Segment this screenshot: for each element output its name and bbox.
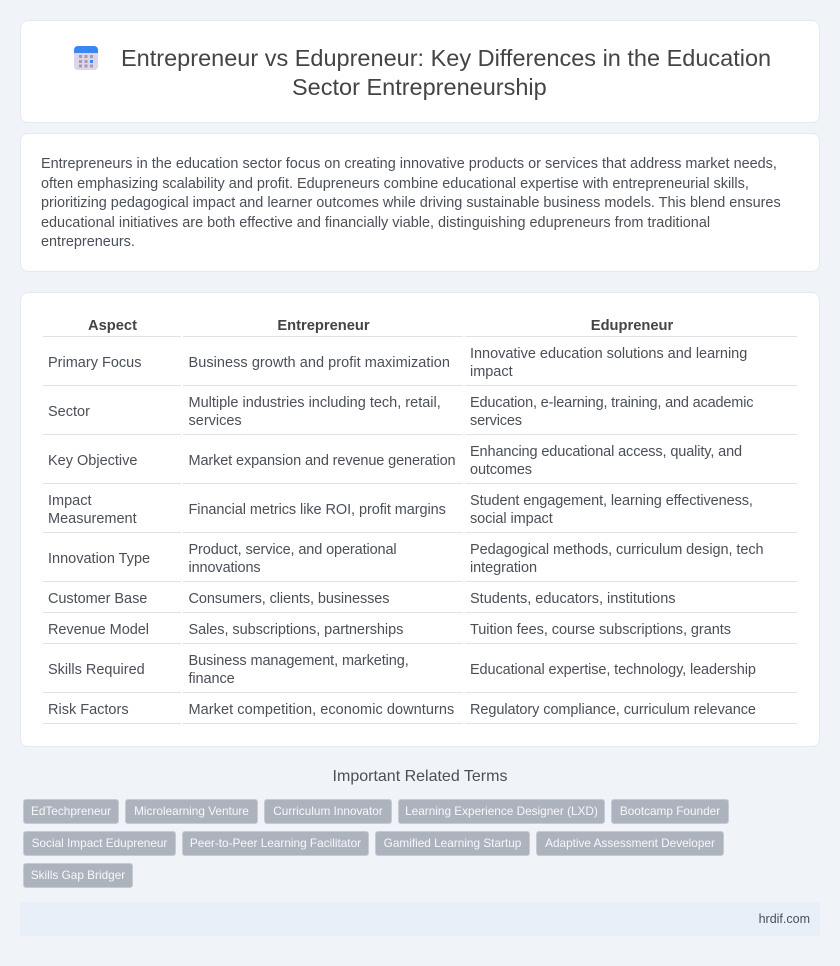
tags: related terms: EdTechpreneur — [31, 804, 111, 818]
heading: related terms: Important Related Terms — [333, 768, 507, 785]
tags: related terms: Bootcamp Founder — [620, 804, 720, 818]
tags: related terms: Microlearning Venture — [134, 804, 249, 818]
row: Key Objective: Market expansion and revenue generation — [188, 453, 455, 469]
panel: introduction — [20, 133, 820, 272]
table column headers: Edupreneur — [591, 318, 673, 334]
row: Impact Measurement: Student engagement, learning effectiveness, — [470, 493, 753, 509]
row: Innovation Type: Pedagogical methods, curriculum design, tech — [470, 542, 764, 558]
row: Key Objective — [48, 444, 742, 478]
row: Risk Factors: Regulatory compliance, curriculum relevance — [470, 702, 756, 718]
text block: introduction: educational initiatives are both effective and financially viable, distinguishing edupreneurs from traditional — [41, 214, 710, 230]
row: Skills Required: Skills Required — [48, 662, 145, 678]
row: Sector: Multiple industries including tech, retail, — [188, 395, 441, 411]
text block: introduction: entrepreneurs. — [41, 234, 135, 250]
title — [121, 45, 771, 100]
row: Key Objective: Enhancing educational access, quality, and — [470, 444, 742, 460]
text block: introduction: often emphasizing scalability and profit. Edupreneurs combine educational expertise with entrepreneurial skills, — [41, 176, 749, 192]
row: Revenue Model — [48, 622, 731, 638]
row: Risk Factors — [48, 702, 756, 718]
tags: related terms: Peer-to-Peer Learning Facilitator — [190, 836, 361, 850]
footer — [20, 902, 820, 936]
row: Skills Required: finance — [188, 671, 235, 687]
row: Primary Focus: impact — [470, 364, 513, 380]
title: Entrepreneur vs Edupreneur: Key Differences in the Education — [121, 45, 771, 71]
row: Innovation Type — [48, 542, 764, 576]
row: Impact Measurement: Impact — [48, 493, 92, 509]
row: Risk Factors: Risk Factors — [48, 702, 129, 718]
row: Innovation Type: integration — [470, 560, 537, 576]
row: Innovation Type: Product, service, and operational — [188, 542, 397, 558]
row: Primary Focus: Business growth and profit maximization — [188, 355, 450, 371]
row: Impact Measurement — [48, 493, 753, 527]
tags: related terms — [23, 799, 729, 888]
row: Innovation Type: innovations — [188, 560, 261, 576]
row: Impact Measurement: social impact — [470, 511, 553, 527]
row: Skills Required — [48, 653, 756, 687]
row: Impact Measurement: Measurement — [48, 511, 137, 527]
row: Customer Base — [48, 591, 676, 607]
icon: calendar — [74, 46, 98, 70]
row: Customer Base: Students, educators, institutions — [470, 591, 676, 607]
tags: related terms: Learning Experience Designer (LXD) — [405, 804, 598, 818]
row: Innovation Type: Innovation Type — [48, 551, 150, 567]
tags: related terms: Curriculum Innovator — [273, 804, 383, 818]
tags: related terms: Skills Gap Bridger — [31, 868, 125, 882]
panel: comparison table — [20, 292, 820, 747]
row: Sector: services — [470, 413, 522, 429]
row: Revenue Model: Tuition fees, course subscriptions, grants — [470, 622, 731, 638]
row: Primary Focus: Innovative education solutions and learning — [470, 346, 747, 362]
row: Impact Measurement: Financial metrics like ROI, profit margins — [188, 502, 446, 518]
row: Key Objective: Key Objective — [48, 453, 137, 469]
row: Customer Base: Customer Base — [48, 591, 147, 607]
table column headers: Aspect — [88, 318, 137, 334]
panel: header — [20, 20, 820, 123]
text block: introduction: Entrepreneurs in the education sector focus on creating innovative products or services that address market needs, — [41, 156, 777, 172]
row: Sector: Sector — [48, 404, 90, 420]
text block: introduction: prioritizing pedagogical impact and learner outcomes while driving sustainable business models. This blend ensures — [41, 195, 781, 211]
row: Risk Factors: Market competition, economic downturns — [188, 702, 454, 718]
text block: introduction — [41, 156, 781, 250]
tags: related terms: Adaptive Assessment Developer — [545, 836, 715, 850]
tags: related terms: Gamified Learning Startup — [384, 836, 521, 850]
title: Sector Entrepreneurship — [292, 74, 547, 100]
row: Skills Required: Educational expertise, technology, leadership — [470, 662, 756, 678]
row: Sector — [48, 395, 754, 429]
table column headers — [88, 318, 673, 334]
row: Revenue Model: Revenue Model — [48, 622, 149, 638]
table column headers: Entrepreneur — [277, 318, 370, 334]
row: Key Objective: outcomes — [470, 462, 532, 478]
row: Customer Base: Consumers, clients, businesses — [188, 591, 389, 607]
row: Revenue Model: Sales, subscriptions, partnerships — [188, 622, 403, 638]
row: Sector: services — [188, 413, 242, 429]
tags: related terms: Social Impact Edupreneur — [32, 836, 167, 850]
row: Primary Focus: Primary Focus — [48, 355, 141, 371]
row: Primary Focus — [48, 346, 747, 380]
footer: source: hrdif.com — [759, 912, 810, 926]
row: Sector: Education, e-learning, training, and academic — [470, 395, 753, 411]
row: Skills Required: Business management, marketing, — [188, 653, 409, 669]
